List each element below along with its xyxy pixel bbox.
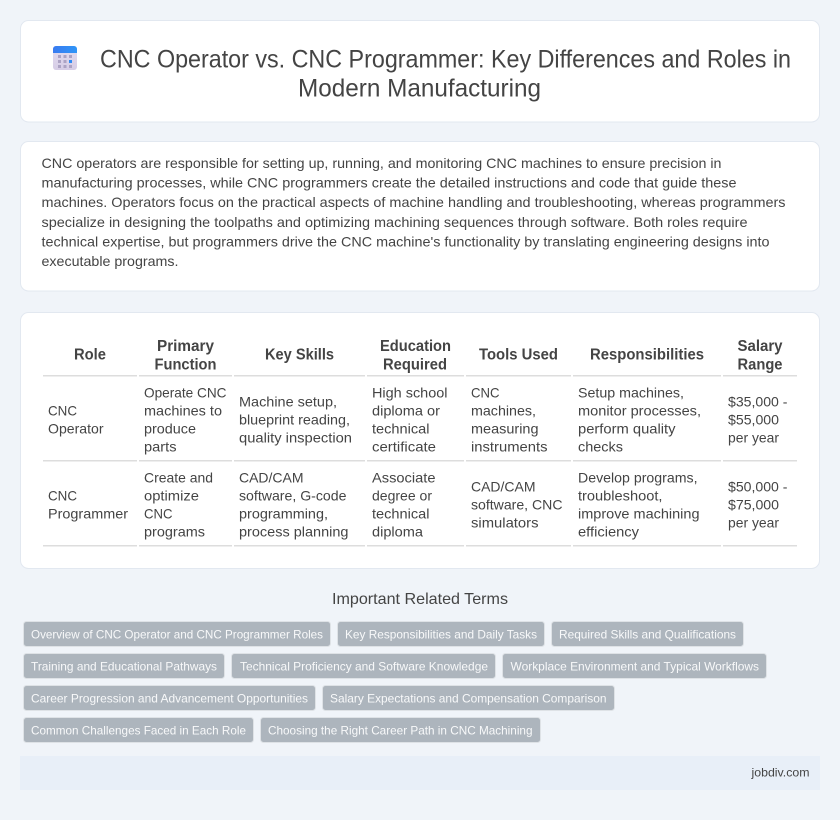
table row: CNC Programmer: troubleshoot, [578,487,662,503]
text block: summary: machines. Operators focus on the practical aspects of machine handling and troubleshooting, whereas programmers [42,194,786,210]
panel: header [20,20,820,122]
table row: CNC Operator: Operate CNC [144,384,226,400]
chip: salary: Salary Expectations and Compensation Comparison [330,691,606,705]
related terms chips [24,622,766,742]
chip: technical proficiency: Technical Proficiency and Software Knowledge [240,659,488,673]
table header row: Tools Used [479,346,558,364]
table row: CNC Programmer: programming, [239,505,328,521]
table row: CNC Operator: monitor processes, [578,402,701,418]
table header row: Salary [738,338,783,355]
table row: CNC Programmer: technical [372,505,430,521]
chip: challenges [24,718,254,742]
heading: Important Related Terms: Important Related Terms [332,591,508,608]
table row: CNC Programmer: simulators [471,514,538,530]
table row: CNC Programmer: CNC [144,505,172,521]
table row: CNC Programmer: optimize [144,487,199,503]
text block: summary: CNC operators are responsible for setting up, running, and monitoring CNC machines to ensure precision in [42,155,722,171]
table row: CNC Operator: instruments [471,438,548,454]
table row: CNC Operator: Setup machines, [578,384,684,400]
table row: CNC Programmer: Programmer [48,505,128,521]
table row: CNC Operator: blueprint reading, [239,411,350,427]
table header row: Required [383,356,447,374]
table row: CNC Programmer: Develop programs, [578,469,698,485]
title [100,46,791,102]
table row: CNC Programmer: software, CNC [471,496,562,512]
table row: CNC Programmer: diploma [372,523,423,539]
table row: CNC Programmer: improve machining [578,505,700,521]
table row: CNC Operator: CNC [471,384,500,400]
table row: CNC Operator: machines to [144,402,222,418]
chip: career path: Choosing the Right Career Path in CNC Machining [268,723,532,737]
chip: workplace [502,654,766,678]
table row: CNC Operator: measuring [471,420,538,436]
table row: CNC Programmer: software, G-code [239,487,347,503]
icon: calendar [53,46,77,70]
table row: CNC Operator: Machine setup, [239,393,337,409]
text block: summary: manufacturing processes, while CNC programmers create the detailed instructions and code that guide these [42,175,737,191]
table header row [74,338,783,374]
table row: CNC Operator: $55,000 [728,411,779,427]
table row: CNC Programmer: degree or [372,487,432,503]
table row: CNC Programmer: programs [144,523,205,539]
chip: technical proficiency [232,654,496,678]
table header row: Range [738,356,783,374]
table row: CNC Programmer: $75,000 [728,496,779,512]
text block: summary [42,155,786,269]
table row: CNC Operator: per year [728,429,779,445]
table row: CNC Operator: $35,000 - [728,393,788,409]
table row: CNC Operator: diploma or [372,402,440,418]
table row: CNC Operator: perform quality [578,420,676,436]
chip: challenges: Common Challenges Faced in Each Role [31,723,246,737]
table header row: Primary [157,338,214,355]
table row: CNC Programmer: Create and [144,469,213,485]
text block: summary: executable programs. [42,253,178,269]
text block: summary: specialize in designing the toolpaths and optimizing machining sequences through software. Both roles require [42,214,748,230]
table row: CNC Programmer: Associate [372,469,436,485]
table row: CNC Programmer [48,469,788,539]
table row: CNC Operator: machines, [471,402,536,418]
chip: overview [24,622,330,646]
chip: skills: Required Skills and Qualifications [559,627,736,641]
table row: CNC Operator: checks [578,438,623,454]
chip: training: Training and Educational Pathways [31,659,217,673]
panel: summary paragraph [20,142,820,291]
table row: CNC Programmer: CNC [48,487,77,503]
table header row: Function [154,356,216,374]
table row: CNC Operator: Operator [48,420,104,436]
table row: CNC Operator: technical [372,420,430,436]
table row: CNC Programmer: process planning [239,523,348,539]
table row: CNC Programmer: CAD/CAM [471,478,536,494]
text block: summary: technical expertise, but programmers drive the CNC machine's functionality by translating engineering designs into [42,233,770,249]
chip: training [24,654,224,678]
table row: CNC Programmer: per year [728,514,779,530]
footer: jobdiv.com [750,766,810,780]
footer [20,756,820,790]
table row: CNC Operator: quality inspection [239,429,352,445]
table header row: Education [380,338,451,355]
chip: career path [260,718,540,742]
table header row: Responsibilities [590,346,704,364]
chip: overview: Overview of CNC Operator and CNC Programmer Roles [31,627,323,641]
chip: skills [552,622,744,646]
table row: CNC Operator: certificate [372,438,436,454]
table row: CNC Operator: CNC [48,402,77,418]
chip: responsibilities [338,622,544,646]
table row: CNC Operator: High school [372,384,448,400]
chip: responsibilities: Key Responsibilities and Daily Tasks [345,627,537,641]
table row: CNC Operator: produce [144,420,196,436]
chip: workplace: Workplace Environment and Typical Workflows [510,659,759,673]
chip: career progression [24,686,316,710]
table header row: Key Skills [265,346,334,364]
chip: salary [322,686,614,710]
table header row: Role [74,346,106,364]
table row: CNC Programmer: $50,000 - [728,478,788,494]
title: Modern Manufacturing [298,74,541,102]
table row: CNC Programmer: CAD/CAM [239,469,304,485]
table row: CNC Operator [48,384,788,454]
table row: CNC Programmer: efficiency [578,523,639,539]
panel: comparison table [20,312,820,568]
chip: career progression: Career Progression and Advancement Opportunities [31,691,308,705]
title: CNC Operator vs. CNC Programmer: Key Differences and Roles in [100,46,791,74]
table row: CNC Operator: parts [144,438,176,454]
